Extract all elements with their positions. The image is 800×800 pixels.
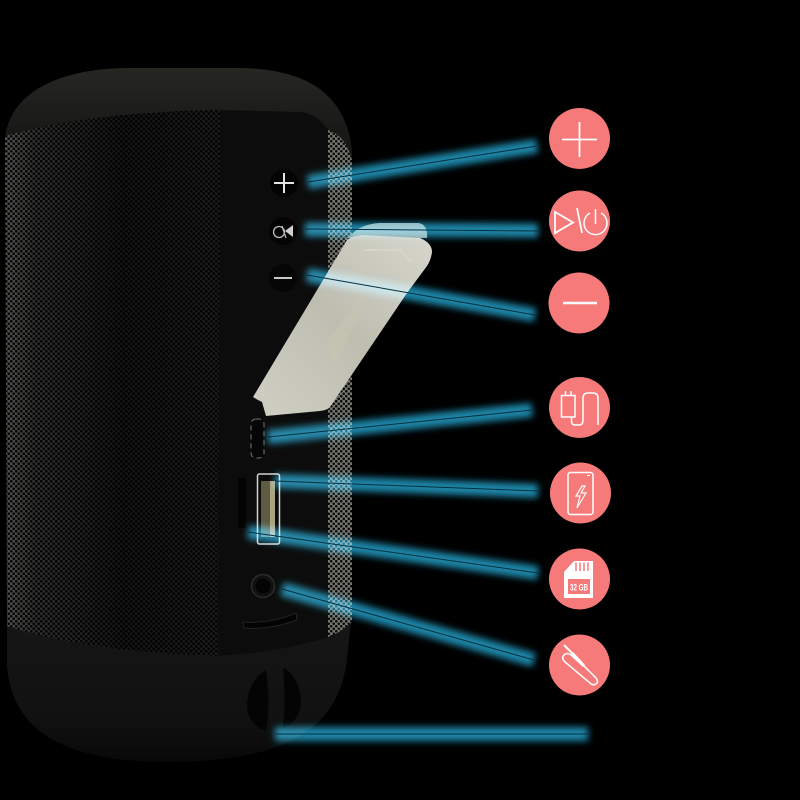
ports: [238, 419, 297, 628]
micro USB port: [251, 419, 264, 458]
line to memory card icon: [248, 532, 538, 573]
audio jack: [252, 574, 274, 598]
button: minus: [269, 264, 297, 292]
icon: audio cable: [549, 634, 610, 696]
rubber port flap: [253, 223, 432, 416]
line to charger icon: [268, 410, 532, 437]
top cap: [5, 68, 352, 200]
button: plus: [270, 169, 298, 197]
control buttons: [269, 169, 298, 292]
connector lines: [248, 146, 588, 734]
line to strap slot: [275, 727, 588, 741]
lower slot: [243, 613, 297, 628]
icon: charger and cable: [549, 377, 610, 438]
SD card slot: [238, 478, 246, 528]
icons column: [548, 108, 611, 696]
button: play and power: [269, 217, 297, 245]
speaker body: [5, 68, 352, 762]
right speaker grille: [328, 130, 352, 637]
line to phone charging icon: [275, 481, 538, 491]
side connector panel: [218, 110, 328, 656]
icon: volume down: [548, 272, 610, 334]
line to minus icon: [307, 275, 535, 315]
line to play and power icon: [305, 229, 538, 231]
icon: volume up: [549, 108, 610, 169]
base: [7, 620, 351, 762]
icon: memory card 32 GB: 32 GB: [570, 582, 588, 594]
strap slot: [247, 668, 301, 731]
icon: phone charging: [550, 462, 611, 524]
left speaker grille: [5, 110, 220, 656]
icon: play and power: [549, 190, 610, 252]
line to audio cable icon: [282, 589, 534, 660]
icon: memory card 32 GB: [549, 548, 610, 610]
line to plus icon: [308, 146, 537, 182]
USB port: [258, 474, 280, 544]
